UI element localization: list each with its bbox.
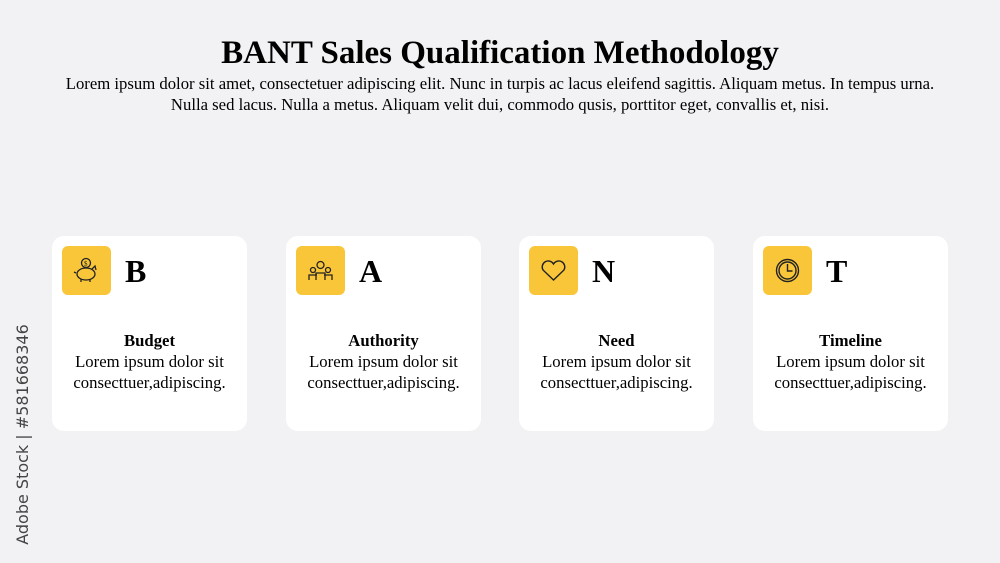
text: budget	[73, 331, 226, 392]
text: authority: Lorem ipsum dolor sit	[309, 352, 458, 371]
subtitle	[66, 74, 934, 114]
text: budget: Budget	[124, 331, 175, 350]
card: authority	[286, 236, 481, 431]
letter N: N	[592, 253, 615, 289]
icon: piggy bank: $	[84, 260, 88, 268]
card: budget	[52, 236, 247, 431]
subtitle: Lorem ipsum dolor sit amet, consectetuer adipiscing elit. Nunc in turpis ac lacus eleifend sagittis. Aliquam metus. In tempus urna.	[66, 74, 934, 93]
title: BANT Sales Qualification Methodology	[221, 35, 779, 71]
card: timeline	[753, 236, 948, 431]
text: need	[540, 331, 693, 392]
letter T: T	[826, 253, 847, 289]
text: budget: consecttuer,adipiscing.	[73, 373, 226, 392]
text: need: Lorem ipsum dolor sit	[542, 352, 691, 371]
watermark text: Adobe Stock | #581668346	[13, 324, 32, 545]
text: timeline: consecttuer,adipiscing.	[774, 373, 927, 392]
card: need	[519, 236, 714, 431]
subtitle: Nulla sed lacus. Nulla a metus. Aliquam velit dui, commodo qusis, porttitor eget, convallis et, nisi.	[171, 95, 829, 114]
text: budget: Lorem ipsum dolor sit	[75, 352, 224, 371]
icon: people	[296, 246, 345, 295]
text: authority: consecttuer,adipiscing.	[307, 373, 460, 392]
icon: heart	[529, 246, 578, 295]
icon: clock	[763, 246, 812, 295]
letter A: A	[359, 253, 382, 289]
text: authority	[307, 331, 460, 392]
icon: piggy bank	[62, 246, 111, 295]
text: timeline	[774, 331, 927, 392]
text: authority: Authority	[348, 331, 419, 350]
text: timeline: Timeline	[819, 331, 882, 350]
text: need: Need	[598, 331, 635, 350]
letter B: B	[125, 253, 146, 289]
text: need: consecttuer,adipiscing.	[540, 373, 693, 392]
text: timeline: Lorem ipsum dolor sit	[776, 352, 925, 371]
